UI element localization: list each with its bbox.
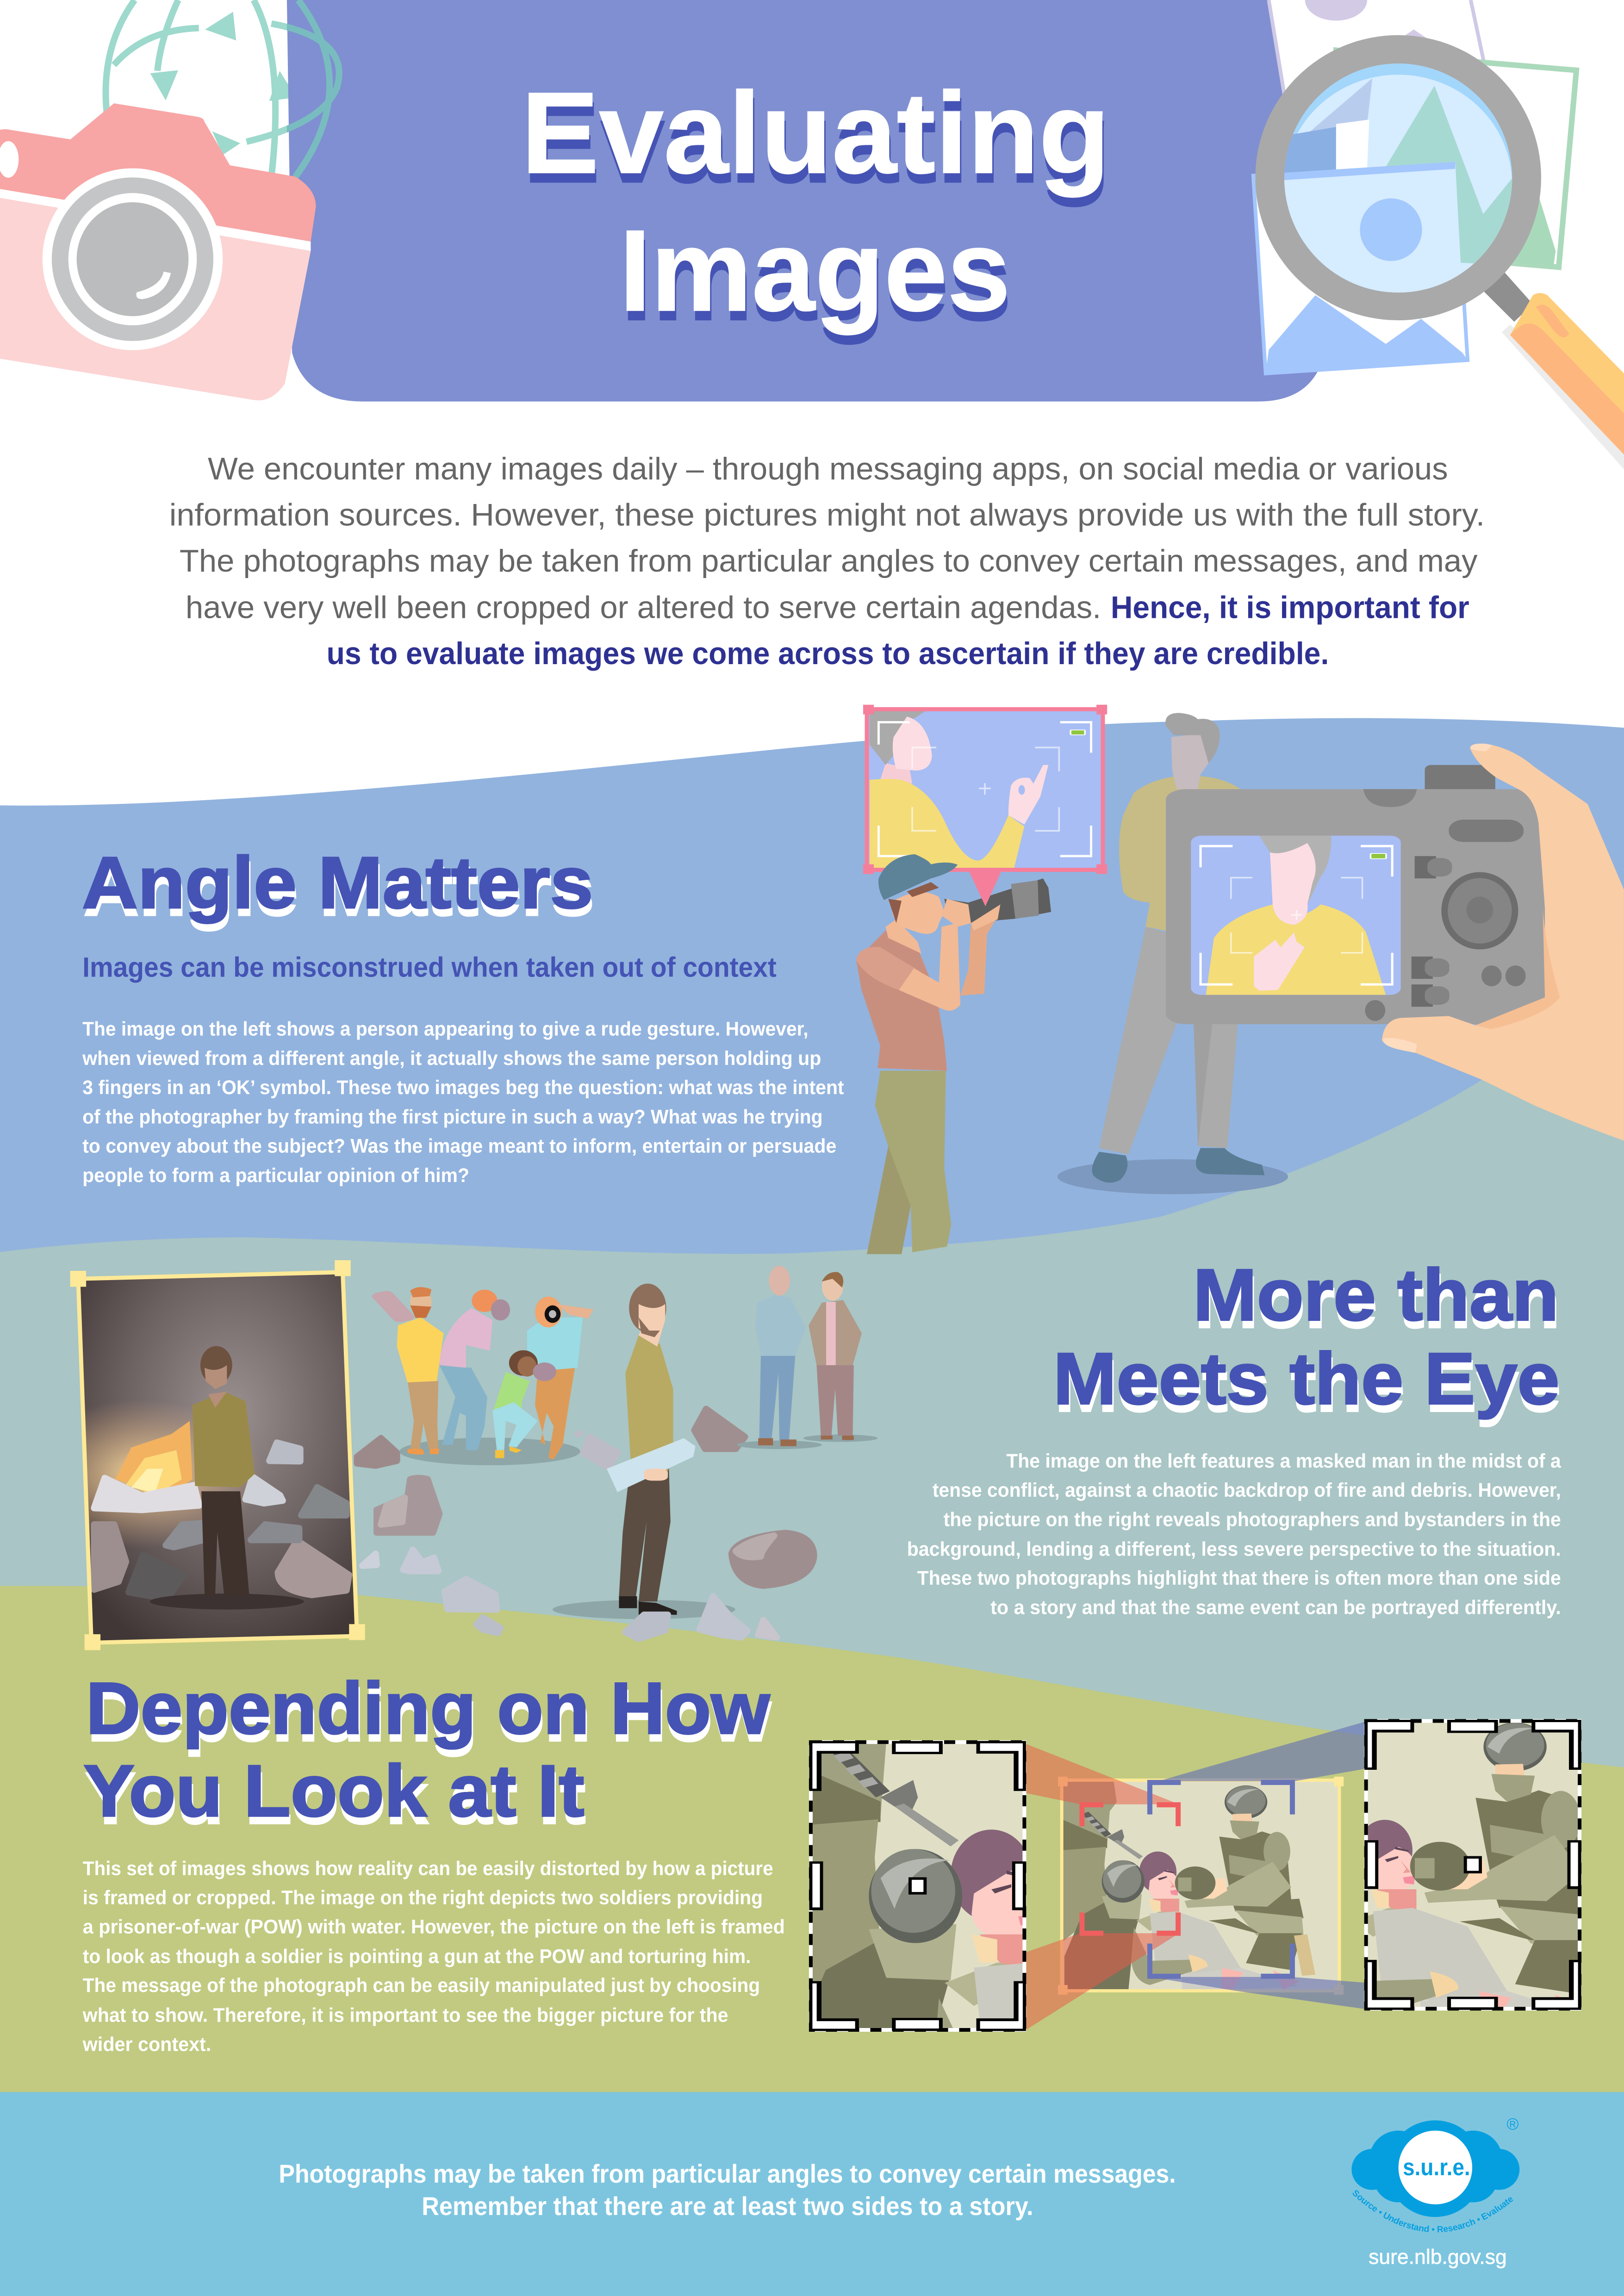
body text: More than Meets the Eye: The image on the left features a masked man in the midst of a	[1006, 1450, 1562, 1472]
website address: sure.nlb.gov.sg	[1369, 2246, 1507, 2269]
centre full picture	[1058, 1777, 1344, 1995]
photographers group	[369, 1287, 593, 1465]
logo: s.u.r.e. cloud: R	[1510, 2120, 1516, 2129]
logo: s.u.r.e. cloud: s.u.r.e.	[1403, 2154, 1470, 2180]
icon: globe of rotating arrows	[106, 0, 339, 177]
body text: Depending on How You Look at It: wider context.	[82, 2033, 211, 2055]
right crop: soldier giving water	[1243, 1715, 1624, 2025]
body text: Depending on How You Look at It: what to show. Therefore, it is important to see the bigger picture for the	[82, 2004, 728, 2027]
hand holding camera	[1382, 744, 1624, 1141]
introduction paragraph: The photographs may be taken from particular angles to convey certain messages, and may	[180, 543, 1477, 579]
introduction paragraph: information sources. However, these pictures might not always provide us with the full story.	[169, 498, 1485, 533]
red crop connector	[1024, 1743, 1179, 2030]
red crop brackets	[1082, 1805, 1178, 1933]
blue crop connector	[1150, 1722, 1366, 2009]
logo: s.u.r.e. cloud: Source • Understand • Research • Evaluate	[1350, 2188, 1515, 2235]
photographer	[856, 854, 1051, 1254]
logo: s.u.r.e. cloud	[1350, 2119, 1519, 2235]
body text: Depending on How You Look at It: to look as though a soldier is pointing a gun at the POW and torturing him.	[83, 1945, 751, 1967]
wide scene rocks	[357, 1409, 814, 1633]
heading: More than Meets the Eye: Meets the Eye	[1053, 1338, 1560, 1419]
title: Images	[619, 206, 1010, 335]
heading: Depending on How You Look at It: Depending on How	[86, 1668, 770, 1749]
header band	[287, 0, 1326, 401]
body text: Depending on How You Look at It	[82, 1858, 785, 2056]
introduction paragraph: We encounter many images daily – through messaging apps, on social media or various	[208, 451, 1448, 486]
body text: Depending on How You Look at It: is framed or cropped. The image on the right depicts two soldiers providing	[83, 1886, 763, 1909]
man with water bottle	[553, 1283, 735, 1619]
left crop: soldier pointing gun	[781, 1671, 1388, 2139]
title	[521, 68, 1110, 335]
digital camera back	[1166, 765, 1545, 1024]
heading: Angle Matters: Angle Matters	[82, 842, 593, 924]
footer message: Remember that there are at least two sides to a story.	[422, 2192, 1033, 2221]
body text: Angle Matters: when viewed from a different angle, it actually shows the same person holding up	[82, 1047, 821, 1070]
title: Evaluating	[521, 68, 1110, 197]
background wave: teal	[0, 937, 1624, 1830]
introduction paragraph	[169, 451, 1485, 671]
header illustration group	[0, 0, 1624, 469]
icon: magnifying glass	[1255, 35, 1624, 469]
body text: Angle Matters: The image on the left shows a person appearing to give a rude gesture. However,	[82, 1018, 809, 1040]
introduction paragraph: us to evaluate images we come across to ascertain if they are credible.	[327, 636, 1329, 671]
globe ring overlapping band	[287, 0, 342, 179]
body text: Angle Matters: 3 fingers in an ‘OK’ symbol. These two images beg the question: what was the intent	[82, 1076, 844, 1099]
blue crop brackets	[1150, 1782, 1292, 1976]
cropped conflict photo	[20, 1260, 365, 1650]
icon: pink camera	[0, 103, 316, 400]
body text: Angle Matters: to convey about the subject? Was the image meant to inform, entertain or persuade	[82, 1135, 836, 1157]
illustration: conflict photo and wider scene	[20, 1260, 877, 1650]
photo frame: rude gesture view	[863, 705, 1107, 874]
heading: More than Meets the Eye: More than	[1193, 1254, 1559, 1336]
body text: More than Meets the Eye: to a story and that the same event can be portrayed differently.	[990, 1597, 1561, 1619]
body text: More than Meets the Eye: the picture on the right reveals photographers and bystanders in the	[944, 1509, 1561, 1531]
body text: Angle Matters	[82, 1018, 844, 1187]
body text: More than Meets the Eye	[907, 1450, 1562, 1619]
body text: Depending on How You Look at It: The message of the photograph can be easily manipulated just by choosing	[83, 1974, 760, 1997]
camera screen: ok gesture view	[1191, 836, 1401, 995]
body text: Depending on How You Look at It: This set of images shows how reality can be easily distorted by how a picture	[83, 1858, 773, 1880]
illustration: angle matters scene	[856, 705, 1624, 1254]
subheading: Angle Matters: Images can be misconstrued when taken out of context	[82, 952, 777, 983]
body text: Angle Matters: people to form a particular opinion of him?	[82, 1164, 469, 1187]
illustration: cropped soldier images	[781, 1671, 1624, 2139]
heading: More than Meets the Eye	[1053, 1254, 1560, 1419]
icon: stack of photos behind magnifier	[1253, 0, 1576, 373]
body text: More than Meets the Eye: These two photographs highlight that there is often more than one side	[917, 1567, 1561, 1589]
introduction paragraph: Hence, it is important for	[1111, 590, 1469, 625]
person behind in grey	[1058, 713, 1288, 1194]
background wave: olive	[0, 1586, 1624, 2094]
rocks in front of man	[625, 1596, 777, 1639]
bystanders	[737, 1266, 877, 1449]
footer band	[0, 2092, 1624, 2296]
pink pointer of photo frame	[968, 870, 1002, 906]
background wave: blue	[0, 718, 1624, 1318]
introduction paragraph: have very well been cropped or altered to serve certain agendas.	[186, 590, 1101, 625]
body text: Depending on How You Look at It: a prisoner-of-war (POW) with water. However, the picture on the left is framed	[83, 1916, 785, 1938]
body text: Angle Matters: of the photographer by framing the first picture in such a way? What was he trying	[82, 1106, 823, 1128]
footer message	[279, 2159, 1176, 2221]
heading: Depending on How You Look at It	[83, 1668, 770, 1832]
body text: More than Meets the Eye: background, lending a different, less severe perspective to the situation.	[907, 1538, 1561, 1560]
body text: More than Meets the Eye: tense conflict, against a chaotic backdrop of fire and debris. However,	[933, 1479, 1561, 1501]
heading: Depending on How You Look at It: You Look at It	[83, 1750, 584, 1832]
footer message: Photographs may be taken from particular angles to convey certain messages.	[279, 2159, 1176, 2188]
